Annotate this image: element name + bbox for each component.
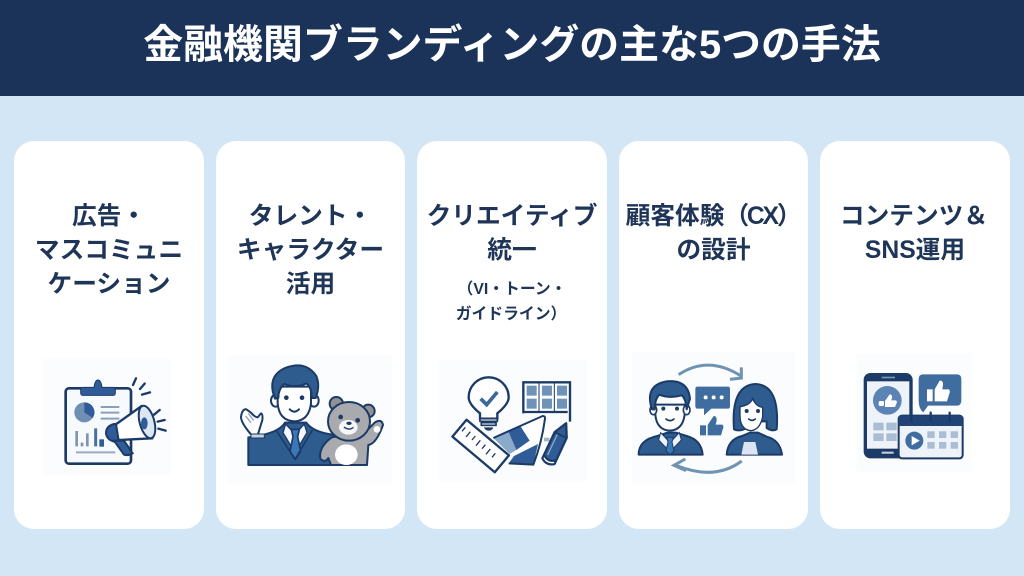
header band bbox=[0, 0, 1024, 96]
heading: customer experience: 顧客体験（CX） bbox=[626, 202, 799, 230]
subheading: VI tone guidelines bbox=[456, 280, 566, 322]
icon: two people with feedback cycle bbox=[638, 364, 783, 474]
icon: bulb, palette, ruler, pencil bbox=[451, 376, 572, 474]
heading: creative unification bbox=[427, 202, 597, 264]
subheading: VI tone guidelines: ガイドライン） bbox=[456, 306, 566, 322]
heading: talent and character: タレント・ bbox=[249, 202, 372, 230]
heading: creative unification: 統一 bbox=[487, 236, 537, 264]
arrow: bottom cycle bbox=[674, 459, 742, 472]
heading: customer experience bbox=[626, 202, 799, 264]
heading: content and SNS: コンテンツ＆ bbox=[840, 202, 988, 230]
panel: content and SNS bbox=[820, 141, 1010, 529]
heading: content and SNS: SNS運用 bbox=[865, 236, 965, 264]
arrow: top cycle bbox=[679, 365, 742, 379]
heading: advertising: 広告・ bbox=[72, 202, 146, 230]
panel: customer experience bbox=[619, 141, 808, 529]
panel: advertising bbox=[14, 141, 204, 529]
icon: clipboard and megaphone bbox=[64, 377, 167, 465]
heading: talent and character: 活用 bbox=[286, 270, 335, 298]
heading: content and SNS bbox=[840, 202, 988, 264]
subheading: VI tone guidelines: （VI・トーン・ bbox=[458, 280, 566, 298]
heading: advertising: マスコミュニ bbox=[35, 236, 183, 264]
icon: businessman and bear mascot bbox=[240, 364, 384, 466]
heading: customer experience: の設計 bbox=[676, 236, 751, 264]
panel: creative unification bbox=[417, 141, 607, 529]
title: 金融機関ブランディングの主な5つの手法 bbox=[143, 23, 881, 67]
heading: creative unification: クリエイティブ bbox=[427, 202, 597, 230]
heading: advertising bbox=[35, 202, 183, 298]
heading: talent and character: キャラクター bbox=[237, 236, 384, 264]
heading: talent and character bbox=[237, 202, 384, 298]
panel: talent and character bbox=[216, 141, 405, 529]
heading: advertising: ケーション bbox=[48, 270, 170, 298]
icon: phone, like bubble, calendar bbox=[864, 373, 964, 460]
